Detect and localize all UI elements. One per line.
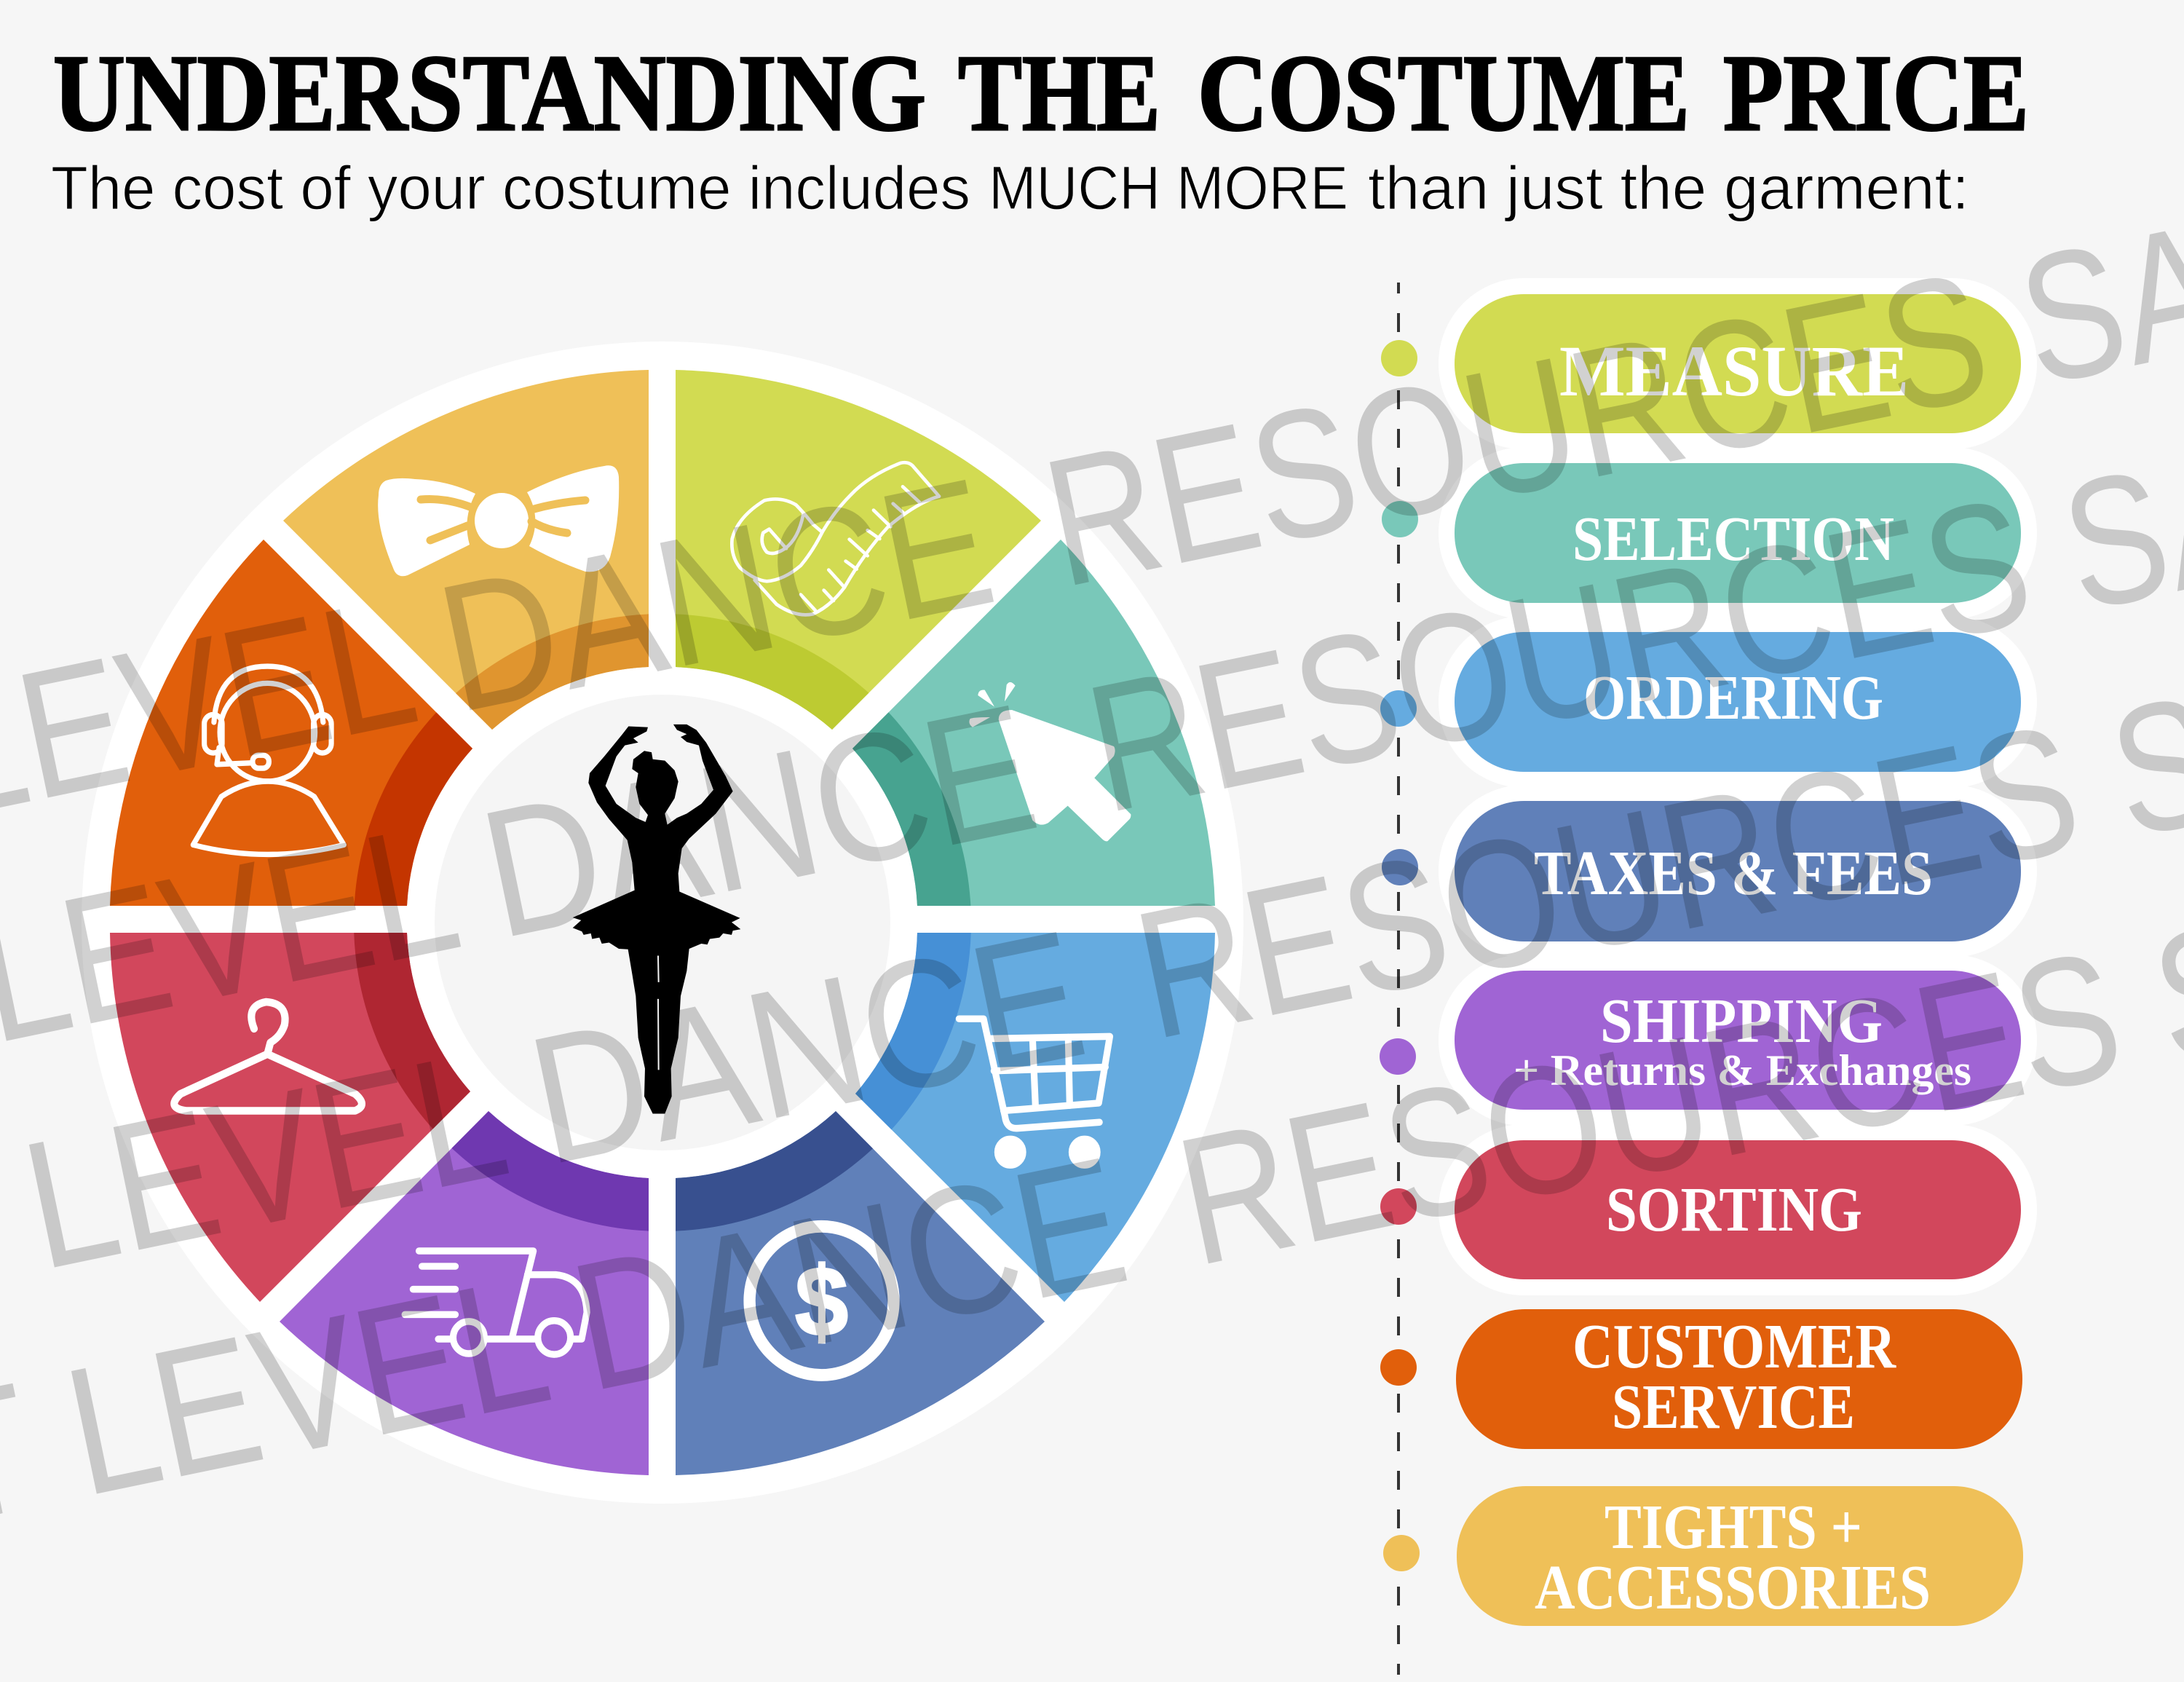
pill: tights and accessories: TIGHTS + [1605, 1491, 1862, 1562]
dot: selection [1382, 501, 1418, 537]
pill: taxes and fees [1455, 801, 2021, 941]
icon: dollar coin [750, 1226, 894, 1375]
pill: measure: MEASURE [1559, 331, 1909, 411]
icon: cursor click [969, 682, 1131, 841]
dot: tights [1383, 1535, 1420, 1571]
segment: measure [676, 370, 1041, 730]
segment: taxes and fees [676, 1111, 1045, 1475]
subtitle: The cost of your costume includes [51, 154, 970, 222]
white halo behind pills [1439, 278, 2037, 1295]
dot: shipping [1380, 1038, 1416, 1075]
segment: ordering [855, 933, 1215, 1302]
watermark line 3 [0, 555, 2184, 1399]
timeline dashed line [1397, 283, 1400, 1675]
watermark line 4 [0, 781, 2184, 1626]
icon: delivery truck [405, 1251, 587, 1354]
subtitle: than just the garment: [1368, 154, 1969, 222]
icons layer [174, 666, 1109, 1375]
watermark line 3: LEVEL [9, 1011, 522, 1308]
subtitle: MUCH MORE [989, 154, 1348, 222]
dot: sorting [1380, 1188, 1417, 1225]
pill: selection [1455, 463, 2021, 603]
title: COSTUME [1198, 33, 1690, 154]
icon: customer service agent [193, 666, 344, 854]
pill: ordering: ORDERING [1583, 662, 1883, 733]
watermark line 1 [0, 103, 2184, 947]
watermark line 2: DANCE [467, 665, 1051, 976]
wheel white base [82, 341, 1243, 1504]
subtitle [51, 154, 1969, 222]
title: THE [958, 33, 1160, 154]
centre disc [435, 695, 890, 1150]
segment: shipping [280, 1111, 649, 1475]
icon: shopping cart [959, 1019, 1109, 1165]
title: PRICE [1723, 33, 2029, 154]
title [53, 33, 2029, 154]
watermark line 4: LEVEL [51, 1237, 564, 1534]
pill: sorting: SORTING [1606, 1174, 1862, 1244]
segment: customer service [110, 540, 472, 906]
pill: sorting [1455, 1140, 2021, 1279]
icon: ballerina [573, 724, 740, 1114]
watermark line 1: RESOURCES [1030, 233, 2003, 625]
segment: tights and accessories [283, 370, 649, 730]
title: UNDERSTANDING [53, 33, 926, 154]
timeline dots [1380, 340, 1420, 1571]
segment: sorting [110, 933, 470, 1302]
dot: taxes [1382, 849, 1418, 885]
pill: tights and accessories: ACCESSORIES [1535, 1552, 1931, 1622]
pill: ordering [1455, 632, 2021, 772]
pill: taxes and fees: TAXES & FEES [1534, 837, 1933, 908]
icon: hanger [174, 1002, 362, 1110]
pill: selection: SELECTION [1572, 503, 1894, 574]
dot: ordering [1380, 690, 1417, 727]
watermark line 4: DANCE [557, 1118, 1142, 1429]
watermark line 3: DANCE [515, 891, 1099, 1203]
icon: measuring tape [732, 462, 939, 615]
watermark line 1: DANCE [424, 439, 1008, 751]
pill: shipping: + Returns & Exchanges [1514, 1046, 1971, 1094]
pill: tights and accessories [1457, 1486, 2023, 1626]
segment: selection [852, 540, 1215, 906]
dot: customer service [1380, 1349, 1417, 1386]
icon: dollar coin: $ [795, 1247, 848, 1357]
pill: shipping [1455, 971, 2021, 1110]
pill: customer service: CUSTOMER [1572, 1311, 1896, 1381]
pill: customer service: SERVICE [1612, 1371, 1855, 1442]
pill: shipping: SHIPPING [1600, 985, 1883, 1056]
pill: measure [1455, 294, 2021, 433]
watermark line 2 [0, 328, 2184, 1173]
icon: bow [378, 465, 619, 576]
wheel chart [82, 328, 1243, 1504]
dot: measure [1381, 340, 1417, 376]
pill: customer service [1456, 1309, 2022, 1449]
